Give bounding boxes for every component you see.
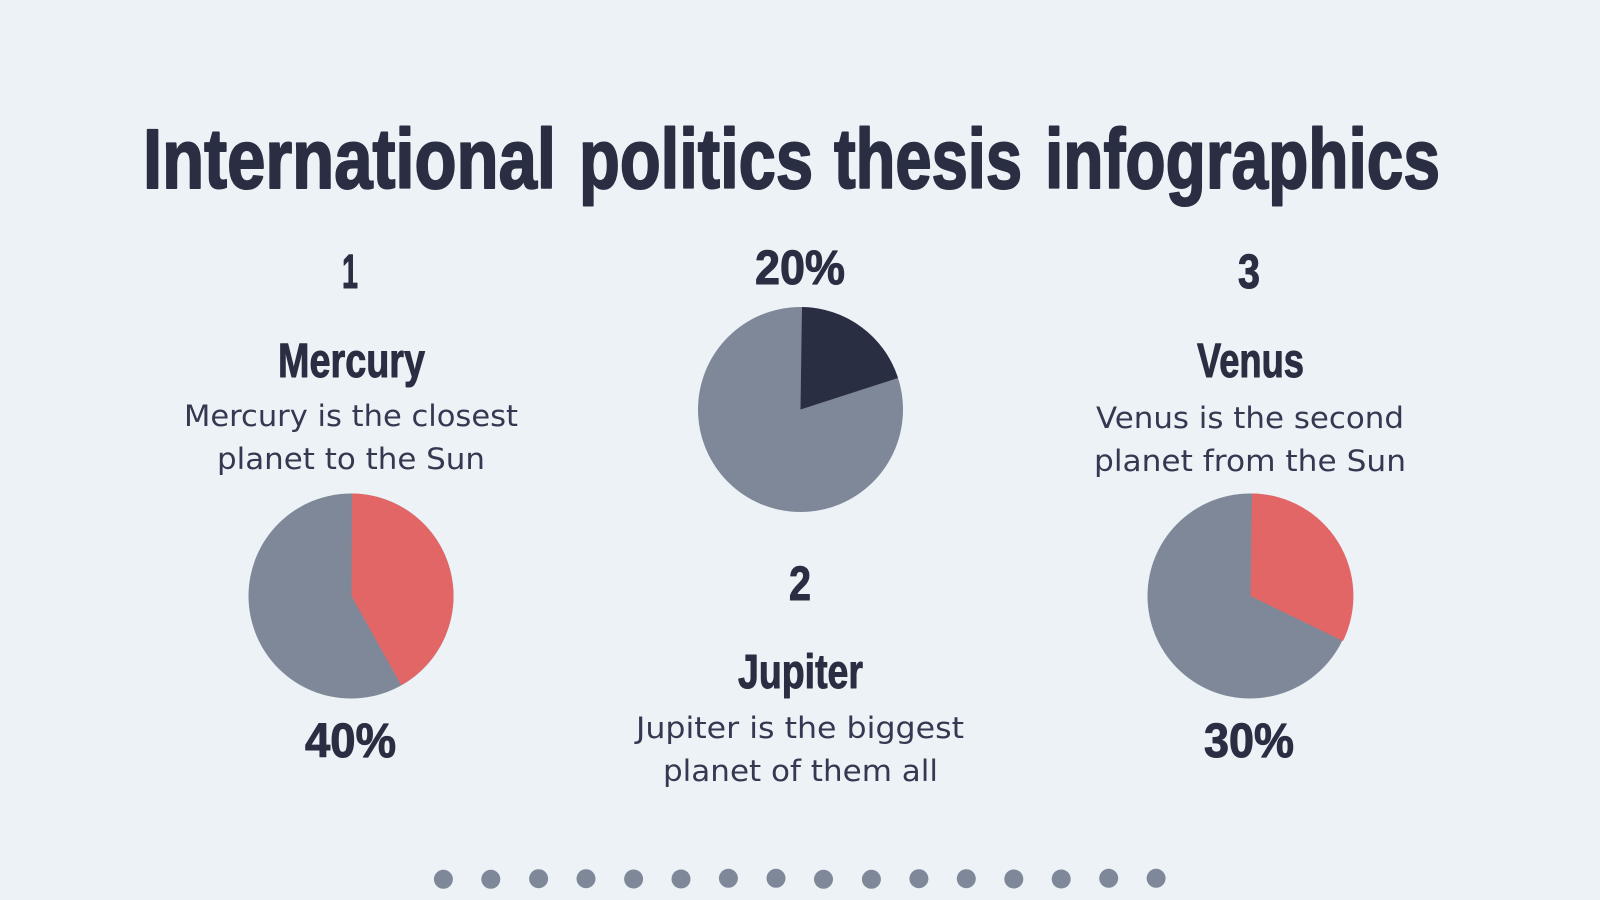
description: Venus: Venus is the second [1096,401,1404,435]
progress dots [434,869,1166,889]
panel: Jupiter [634,242,964,788]
description: Jupiter: Jupiter is the biggest [634,711,964,745]
panel: Venus [1094,246,1406,768]
title: politics [579,112,813,206]
description: Mercury: planet to the Sun [217,442,485,476]
heading: Mercury: Mercury [278,335,425,388]
description: Venus [1094,401,1406,478]
description: Jupiter: planet of them all [663,754,938,788]
number 2: 2 [789,558,811,611]
number 1: 1 [342,246,358,299]
value: 30%: 30% [1204,715,1294,768]
description: Jupiter [634,711,964,788]
number 3: 3 [1238,246,1260,299]
pie chart: 20% [698,307,903,512]
title: infographics [1045,112,1440,206]
panel: Mercury [184,246,518,768]
description: Mercury [184,399,518,476]
heading: Jupiter: Jupiter [738,646,863,699]
value: 40%: 40% [305,715,396,768]
title: International [143,112,556,206]
title [143,112,1440,206]
pie chart: 40% [248,494,454,698]
heading: Venus: Venus [1197,335,1304,388]
pie chart: 30% [1148,494,1353,698]
value: 20%: 20% [755,242,845,295]
title: thesis [834,112,1022,206]
description: Venus: planet from the Sun [1094,444,1406,478]
description: Mercury: Mercury is the closest [184,399,518,433]
